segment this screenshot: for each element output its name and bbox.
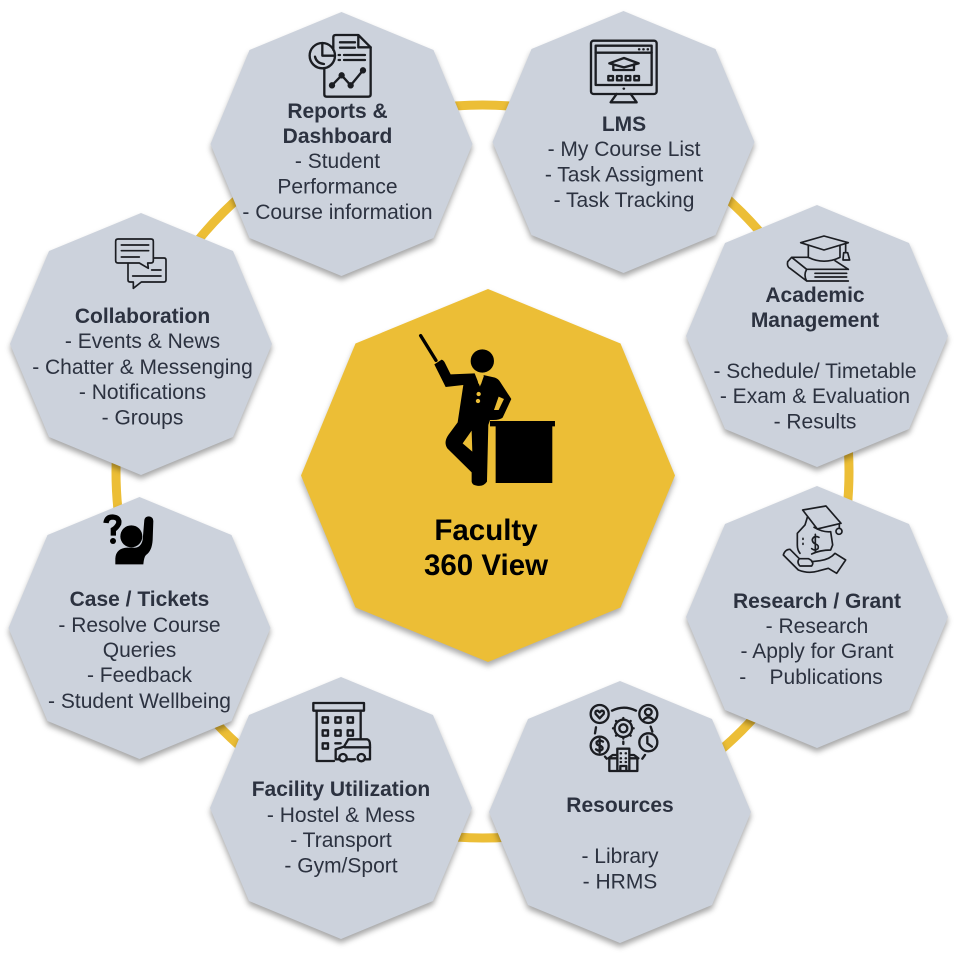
text: center title: 360 View	[424, 549, 548, 582]
icon: chat bubbles	[116, 239, 166, 288]
text: center title	[424, 514, 548, 582]
panel: resources	[489, 681, 751, 943]
text: reports: Dashboard	[283, 125, 392, 148]
panel: facility utilization	[210, 677, 472, 939]
panel: academic management	[686, 205, 948, 467]
text: research: Research / Grant	[733, 590, 901, 613]
text: academic: - Schedule/ Timetable	[713, 360, 917, 383]
text: reports: - Student	[295, 150, 380, 173]
panel: collaboration	[10, 213, 272, 475]
panel: reports and dashboard	[210, 12, 472, 276]
text: reports: - Course information	[242, 201, 433, 224]
text: resources: - Library	[581, 845, 659, 868]
text: academic: - Results	[774, 410, 856, 434]
text: case: Case / Tickets	[70, 588, 209, 611]
octagon: collaboration	[10, 213, 272, 475]
text: LMS	[545, 113, 703, 212]
panel: case and tickets	[8, 497, 270, 759]
text: case: - Resolve Course	[58, 614, 221, 637]
text: collaboration: Collaboration	[75, 305, 210, 328]
panel: research and grant	[686, 486, 948, 748]
icon: resources network	[591, 705, 657, 771]
text: academic: Management	[751, 309, 879, 332]
text: academic	[713, 284, 917, 434]
text: center title: Faculty	[434, 514, 538, 547]
text: resources	[566, 794, 674, 894]
octagon: resources	[489, 681, 751, 943]
text: facility	[252, 778, 430, 878]
text: reports: Performance	[277, 176, 398, 198]
text: LMS: LMS	[602, 113, 646, 136]
text: LMS: - Task Assigment	[545, 164, 703, 186]
text: facility: - Hostel & Mess	[267, 804, 415, 827]
text: facility: - Transport	[290, 829, 392, 852]
text: collaboration: - Groups	[102, 406, 183, 430]
text: facility: Facility Utilization	[252, 778, 430, 801]
icon: monitor with graduation cap	[591, 41, 657, 102]
octagon: research	[686, 486, 948, 748]
text: academic: - Exam & Evaluation	[720, 385, 910, 408]
text: collaboration: - Events & News	[65, 330, 220, 353]
text: research: - Research	[766, 615, 868, 638]
octagon: center	[301, 289, 675, 662]
text: research: - Apply for Grant	[741, 640, 894, 663]
icon: hand with money bag and cap	[783, 506, 846, 573]
icon: person raising hand with question mark	[106, 516, 153, 564]
text: resources: - HRMS	[583, 870, 657, 894]
panel: LMS	[492, 11, 754, 273]
octagon: LMS	[492, 11, 754, 273]
text: reports: Reports &	[287, 100, 388, 123]
octagon: facility	[210, 677, 472, 939]
octagon: academic	[686, 205, 948, 467]
icon: teacher with pointer at desk	[421, 336, 555, 486]
text: case	[48, 588, 231, 713]
text: LMS: - Task Tracking	[554, 189, 694, 212]
text: academic: Academic	[765, 284, 865, 307]
text: case: Queries	[103, 639, 176, 662]
text: case: - Student Wellbeing	[48, 690, 231, 713]
text: resources: Resources	[566, 794, 674, 817]
octagon: reports	[210, 12, 472, 276]
icon: building and car	[313, 703, 370, 761]
text: reports	[242, 100, 433, 224]
panel: faculty 360 view center	[301, 289, 675, 662]
text: research	[733, 590, 901, 689]
connecting ring	[116, 105, 849, 838]
icon: book and graduation cap	[787, 236, 850, 281]
text: case: - Feedback	[87, 664, 193, 687]
text: collaboration: - Notifications	[79, 381, 206, 404]
text: facility: - Gym/Sport	[284, 854, 398, 878]
text: collaboration: - Chatter & Messenging	[32, 356, 253, 379]
octagon: case	[8, 497, 270, 759]
text: collaboration	[32, 305, 253, 430]
icon: report document	[310, 35, 371, 97]
text: research: - Publications	[739, 666, 883, 689]
text: LMS: - My Course List	[548, 138, 701, 161]
